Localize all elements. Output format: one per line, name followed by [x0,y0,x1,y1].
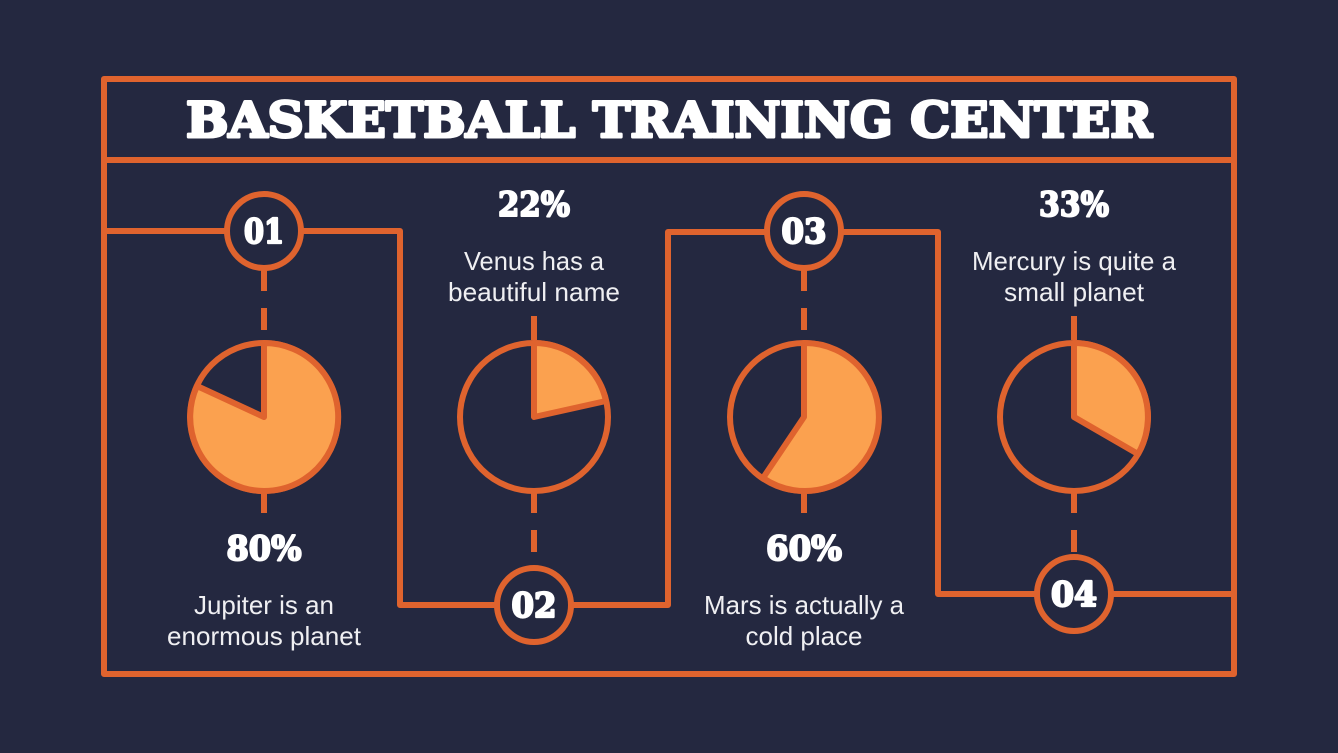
description: Jupiter: Jupiter is an [194,590,334,620]
description: Mars: Mars is actually a [704,590,905,620]
panel: step 4 Mercury [972,185,1177,631]
description: Jupiter: enormous planet [167,621,362,651]
value 33%: 33% [1039,185,1109,225]
connector dashes to pie 3 [801,270,807,513]
description: Mercury: Mercury is quite a [972,246,1177,276]
value 60%: 60% [766,529,842,569]
description: Mercury: small planet [1004,277,1145,307]
step badge 03: 03 [782,212,826,252]
pie chart 33% [1000,343,1148,491]
value 80%: 80% [226,529,302,569]
pie chart 80% [190,343,338,491]
title: BASKETBALL TRAINING CENTER [186,91,1153,149]
step badge 04 [1037,557,1111,631]
panel: step 3 Mars [704,194,905,651]
value 22%: 22% [498,185,570,225]
description: Mars: cold place [746,621,862,651]
panel: step 1 Jupiter [167,194,362,651]
step badge 02 [497,568,571,642]
panel: step 2 Venus [448,185,620,642]
connector dashes to pie 2 [531,316,537,552]
connector dashes to pie 1 [261,270,267,513]
step badge 02: 02 [512,586,556,626]
step badge 01: 01 [244,212,284,252]
step badge 01 [227,194,301,268]
description: Venus: beautiful name [448,277,620,307]
connector dashes to pie 4 [1071,316,1077,552]
pie chart 22% [460,343,608,491]
step badge 04: 04 [1051,575,1097,615]
pie chart 60% [730,343,879,491]
step badge 03 [767,194,841,268]
court frame with title divider [104,79,1234,674]
connector line through the steps [104,231,1234,605]
description: Venus: Venus has a [464,246,605,276]
